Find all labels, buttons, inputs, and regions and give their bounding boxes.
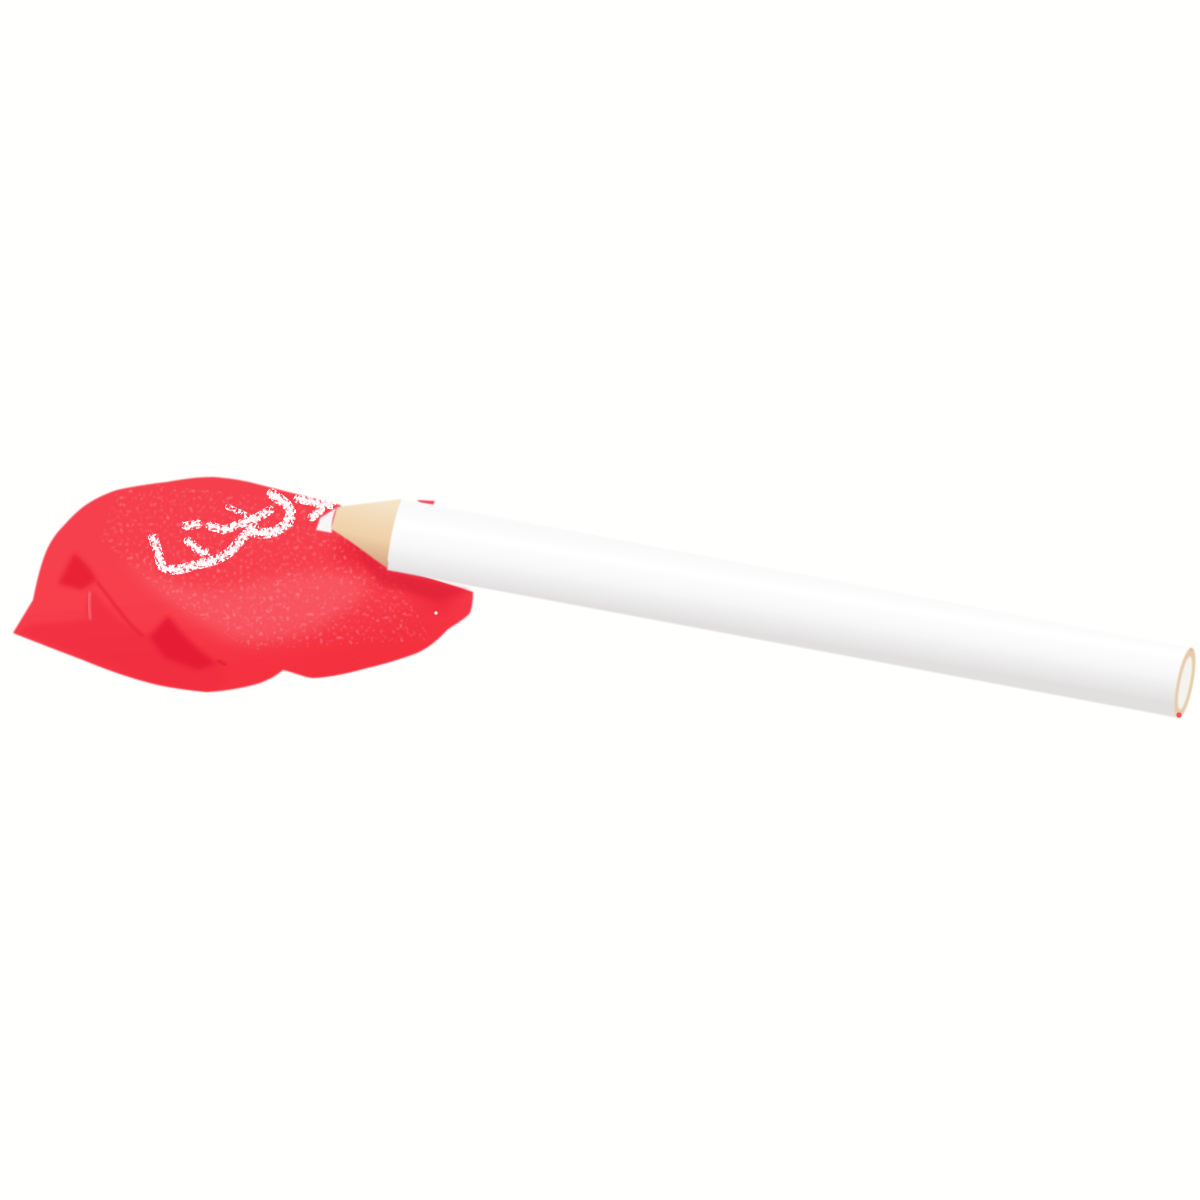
red fleck behind pencil (417, 500, 435, 505)
chalk scribble speckle (153, 494, 332, 570)
pencil end core (1175, 656, 1195, 710)
photo scene: pencil marking a red petal (12, 476, 1196, 719)
small pink fleck on top of end (1189, 648, 1193, 652)
pencil body (387, 499, 1193, 718)
chalk scribble solid core (153, 494, 332, 570)
wood cone (331, 499, 402, 568)
petal folds and shading (10, 475, 480, 695)
red fleck on end (1176, 712, 1182, 718)
petal base shape (13, 477, 473, 692)
pencil shadow on petal (345, 535, 470, 600)
small white speck on petal (434, 611, 438, 615)
red petal (10, 475, 480, 695)
white pencil (316, 499, 1200, 720)
pencil end wood ring (1170, 646, 1200, 720)
pencil lead tip (316, 508, 336, 533)
